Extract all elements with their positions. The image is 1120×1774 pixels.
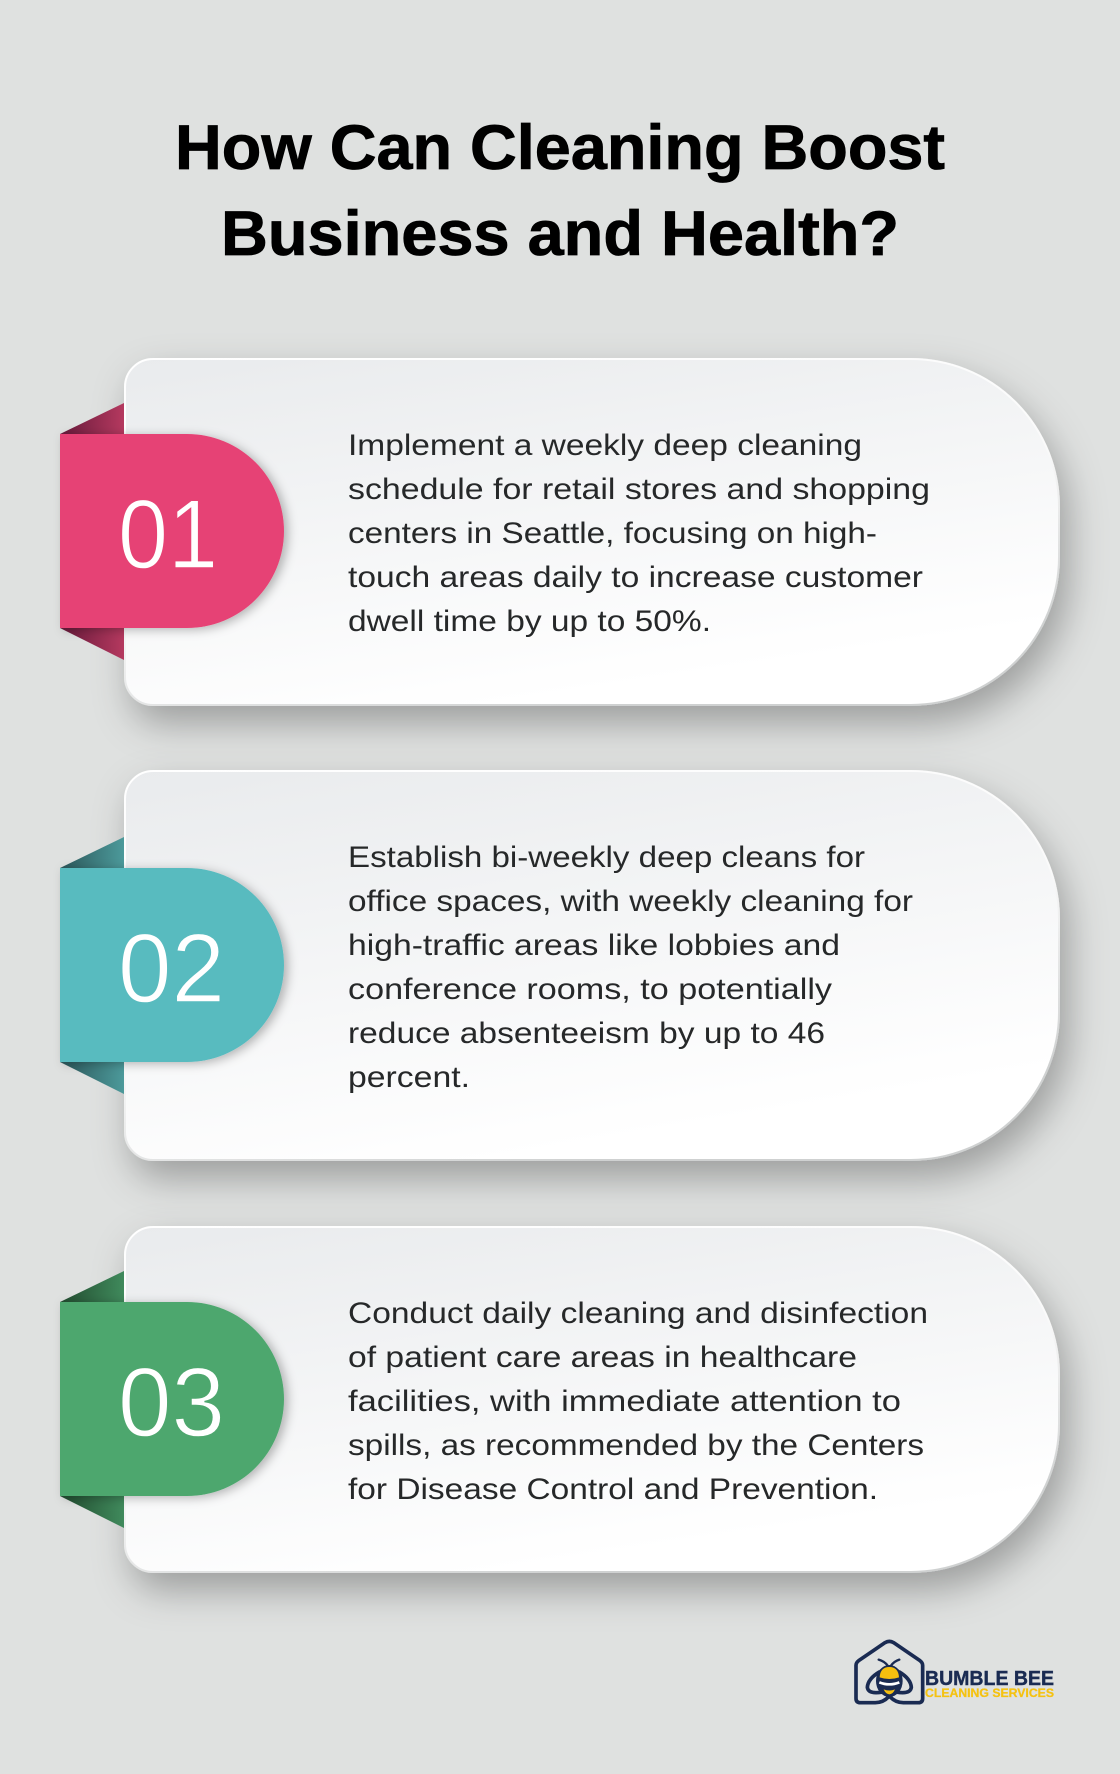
step 1 text: centers in Seattle, focusing on high- <box>348 517 877 550</box>
step 1 text: touch areas daily to increase customer <box>348 561 923 594</box>
number 03: 03 <box>118 1347 225 1457</box>
panel: step 1 <box>60 359 1059 705</box>
step 1 text: dwell time by up to 50%. <box>348 605 711 638</box>
title <box>175 113 945 269</box>
ribbon fold: bottom <box>60 1496 124 1528</box>
step 2 text: Establish bi-weekly deep cleans for <box>348 841 865 874</box>
ribbon fold: top <box>60 1271 124 1302</box>
step 3 text: Conduct daily cleaning and disinfection <box>348 1297 928 1330</box>
step 2 text: office spaces, with weekly cleaning for <box>348 885 913 918</box>
step 2 text: conference rooms, to potentially <box>348 973 832 1006</box>
ribbon fold: bottom <box>60 628 124 660</box>
step 2 text <box>348 841 913 1094</box>
logo tagline: CLEANING SERVICES <box>925 1688 1054 1700</box>
step 3 text: for Disease Control and Prevention. <box>348 1473 878 1506</box>
step 3 text <box>348 1297 928 1506</box>
title: Business and Health? <box>221 199 899 269</box>
step 2 text: high-traffic areas like lobbies and <box>348 929 840 962</box>
ribbon fold: top <box>60 403 124 434</box>
title: How Can Cleaning Boost <box>175 113 945 183</box>
panel: step 3 <box>60 1227 1059 1572</box>
step 3 text: of patient care areas in healthcare <box>348 1341 857 1374</box>
logo: Bumble Bee Cleaning Services <box>856 1641 1054 1703</box>
step 1 text <box>348 429 930 638</box>
number badge <box>60 868 284 1062</box>
number 02: 02 <box>118 913 225 1023</box>
step 2 text: percent. <box>348 1061 470 1094</box>
card background <box>125 771 1059 1160</box>
step 2 text: reduce absenteeism by up to 46 <box>348 1017 825 1050</box>
step 3 text: facilities, with immediate attention to <box>348 1385 901 1418</box>
step 3 text: spills, as recommended by the Centers <box>348 1429 924 1462</box>
panel: step 2 <box>60 771 1059 1160</box>
logo wordmark: BUMBLE BEE <box>925 1668 1054 1690</box>
icon: bee in house <box>856 1641 923 1703</box>
number badge <box>60 434 284 628</box>
ribbon fold: bottom <box>60 1062 124 1094</box>
card background <box>125 359 1059 705</box>
step 1 text: Implement a weekly deep cleaning <box>348 429 862 462</box>
number 01: 01 <box>118 479 218 589</box>
step 1 text: schedule for retail stores and shopping <box>348 473 930 506</box>
number badge <box>60 1302 284 1496</box>
ribbon fold: top <box>60 837 124 868</box>
card background <box>125 1227 1059 1572</box>
